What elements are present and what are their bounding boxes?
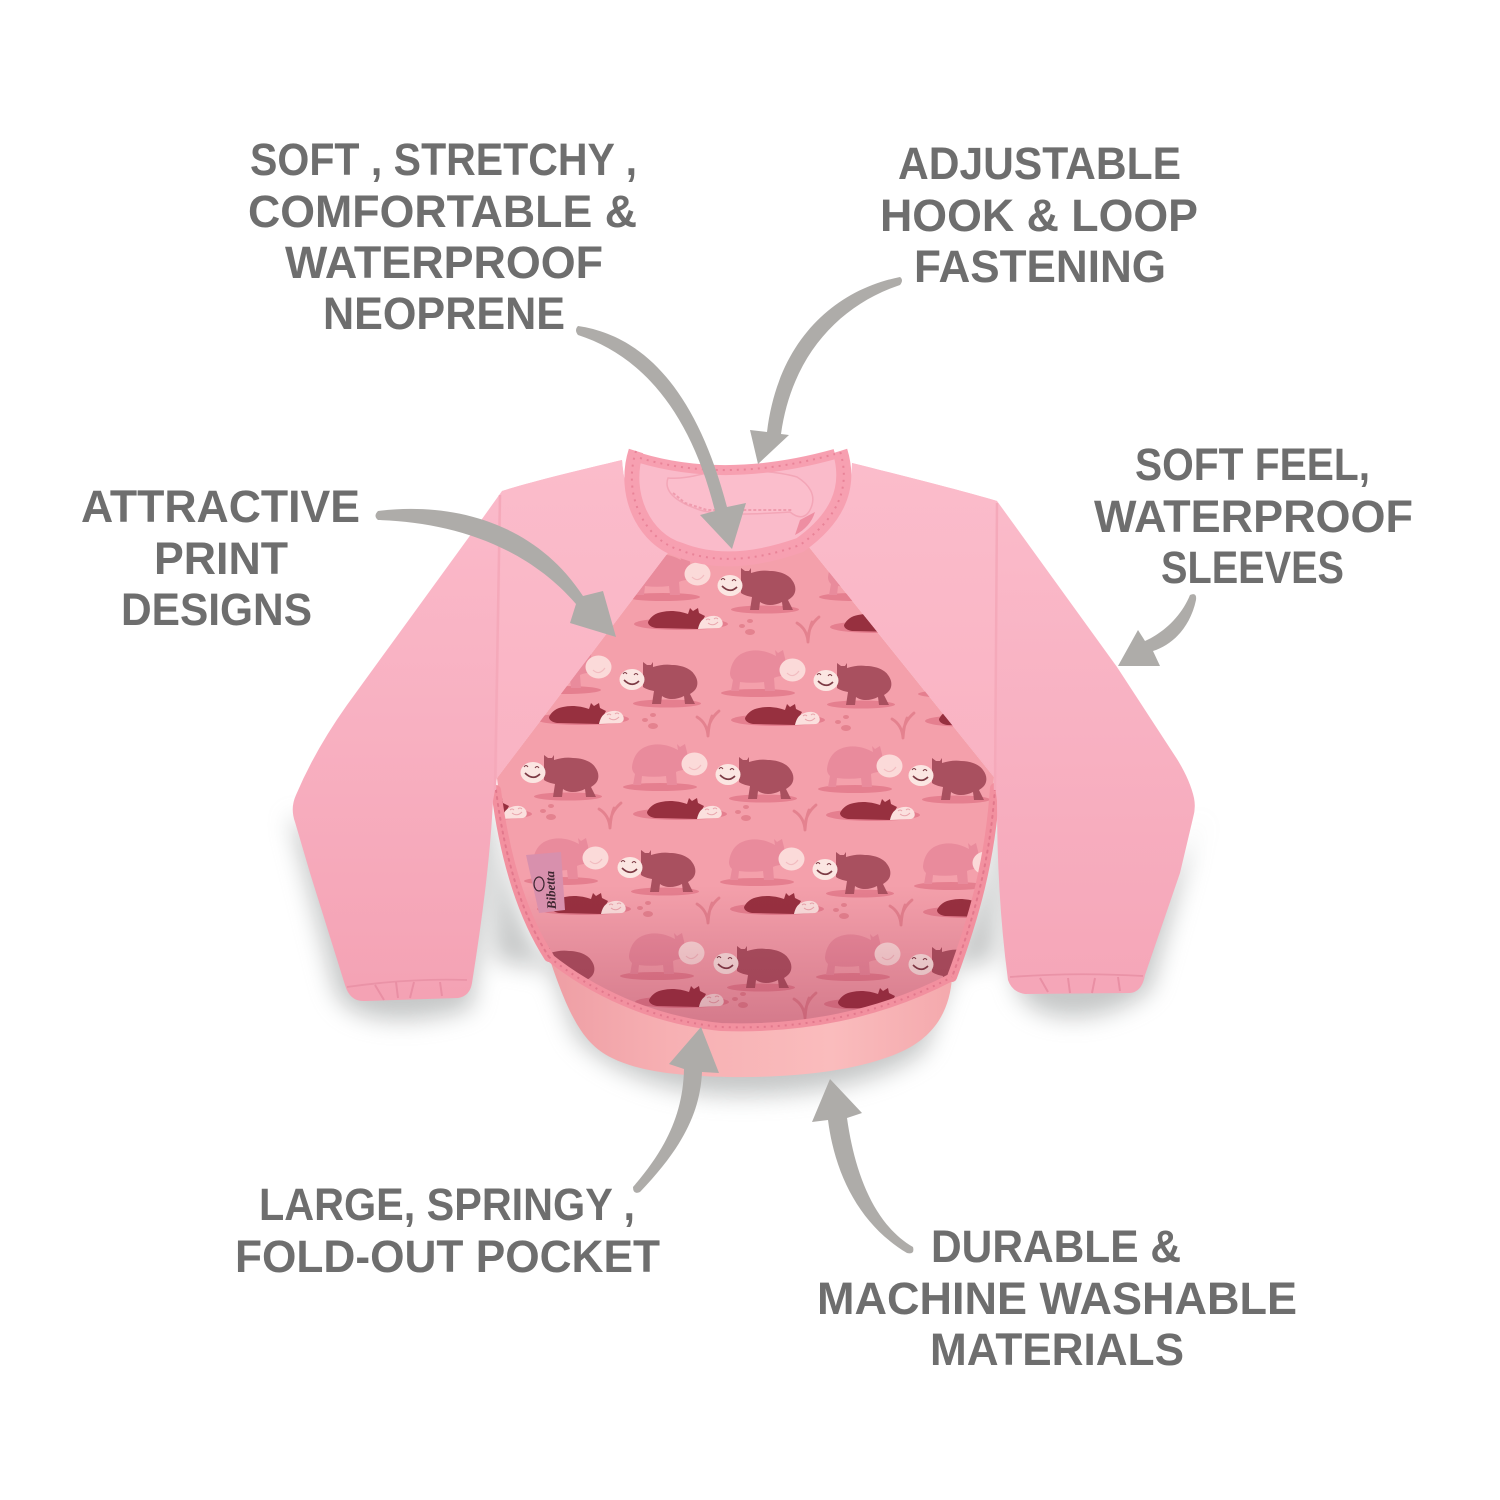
callout: pocket (235, 1179, 660, 1282)
right sleeve (809, 463, 1195, 994)
arrow: to neoprene body (576, 326, 746, 549)
brand tag: Bibetta (542, 870, 559, 911)
arrow: to print designs (376, 509, 616, 637)
callout: durable materials (817, 1221, 1297, 1375)
arrow: to durable materials (812, 1079, 913, 1253)
callout: durable materials: MACHINE WASHABLE (817, 1273, 1297, 1324)
arrow: to hook and loop fastening (750, 277, 902, 464)
hippo print pattern (502, 555, 989, 1024)
callout: print designs: DESIGNS (121, 584, 312, 635)
bib side binding (496, 788, 995, 977)
callout: sleeves: SOFT FEEL, (1135, 439, 1370, 490)
callout: soft stretchy neoprene (248, 134, 637, 339)
callout: print designs: PRINT (154, 533, 288, 584)
bib print panel (497, 548, 994, 1024)
callout: soft stretchy neoprene: SOFT , STRETCHY , (250, 134, 637, 185)
arrow: to pocket (633, 1027, 719, 1193)
fold-out pocket (549, 957, 952, 1077)
callout: pocket: LARGE, SPRINGY , (259, 1179, 635, 1230)
callout: durable materials: MATERIALS (930, 1324, 1184, 1375)
brand tag (526, 852, 565, 913)
soft drop shadow beneath the bib (290, 800, 1205, 1095)
callout: durable materials: DURABLE & (931, 1221, 1181, 1272)
callout: adjustable fastening: ADJUSTABLE (898, 138, 1181, 189)
left sleeve (293, 460, 670, 1001)
callout: soft stretchy neoprene: COMFORTABLE & (248, 186, 637, 237)
callout: soft stretchy neoprene: NEOPRENE (323, 288, 565, 339)
callout: sleeves: SLEEVES (1161, 542, 1344, 593)
callout: adjustable fastening: FASTENING (914, 241, 1166, 292)
callout: print designs (81, 481, 360, 635)
callout: sleeves (1094, 439, 1413, 593)
callout: soft stretchy neoprene: WATERPROOF (285, 237, 603, 288)
callout: print designs: ATTRACTIVE (81, 481, 360, 532)
callout: adjustable fastening: HOOK & LOOP (880, 190, 1198, 241)
arrow: to sleeves (1118, 594, 1196, 666)
neck opening with hook and loop strap (632, 451, 844, 559)
callout: pocket: FOLD-OUT POCKET (235, 1231, 660, 1282)
infographic: sleeved bib with feature callouts (82, 143, 1412, 1366)
callout: adjustable fastening (880, 138, 1198, 292)
callout: sleeves: WATERPROOF (1094, 491, 1413, 542)
